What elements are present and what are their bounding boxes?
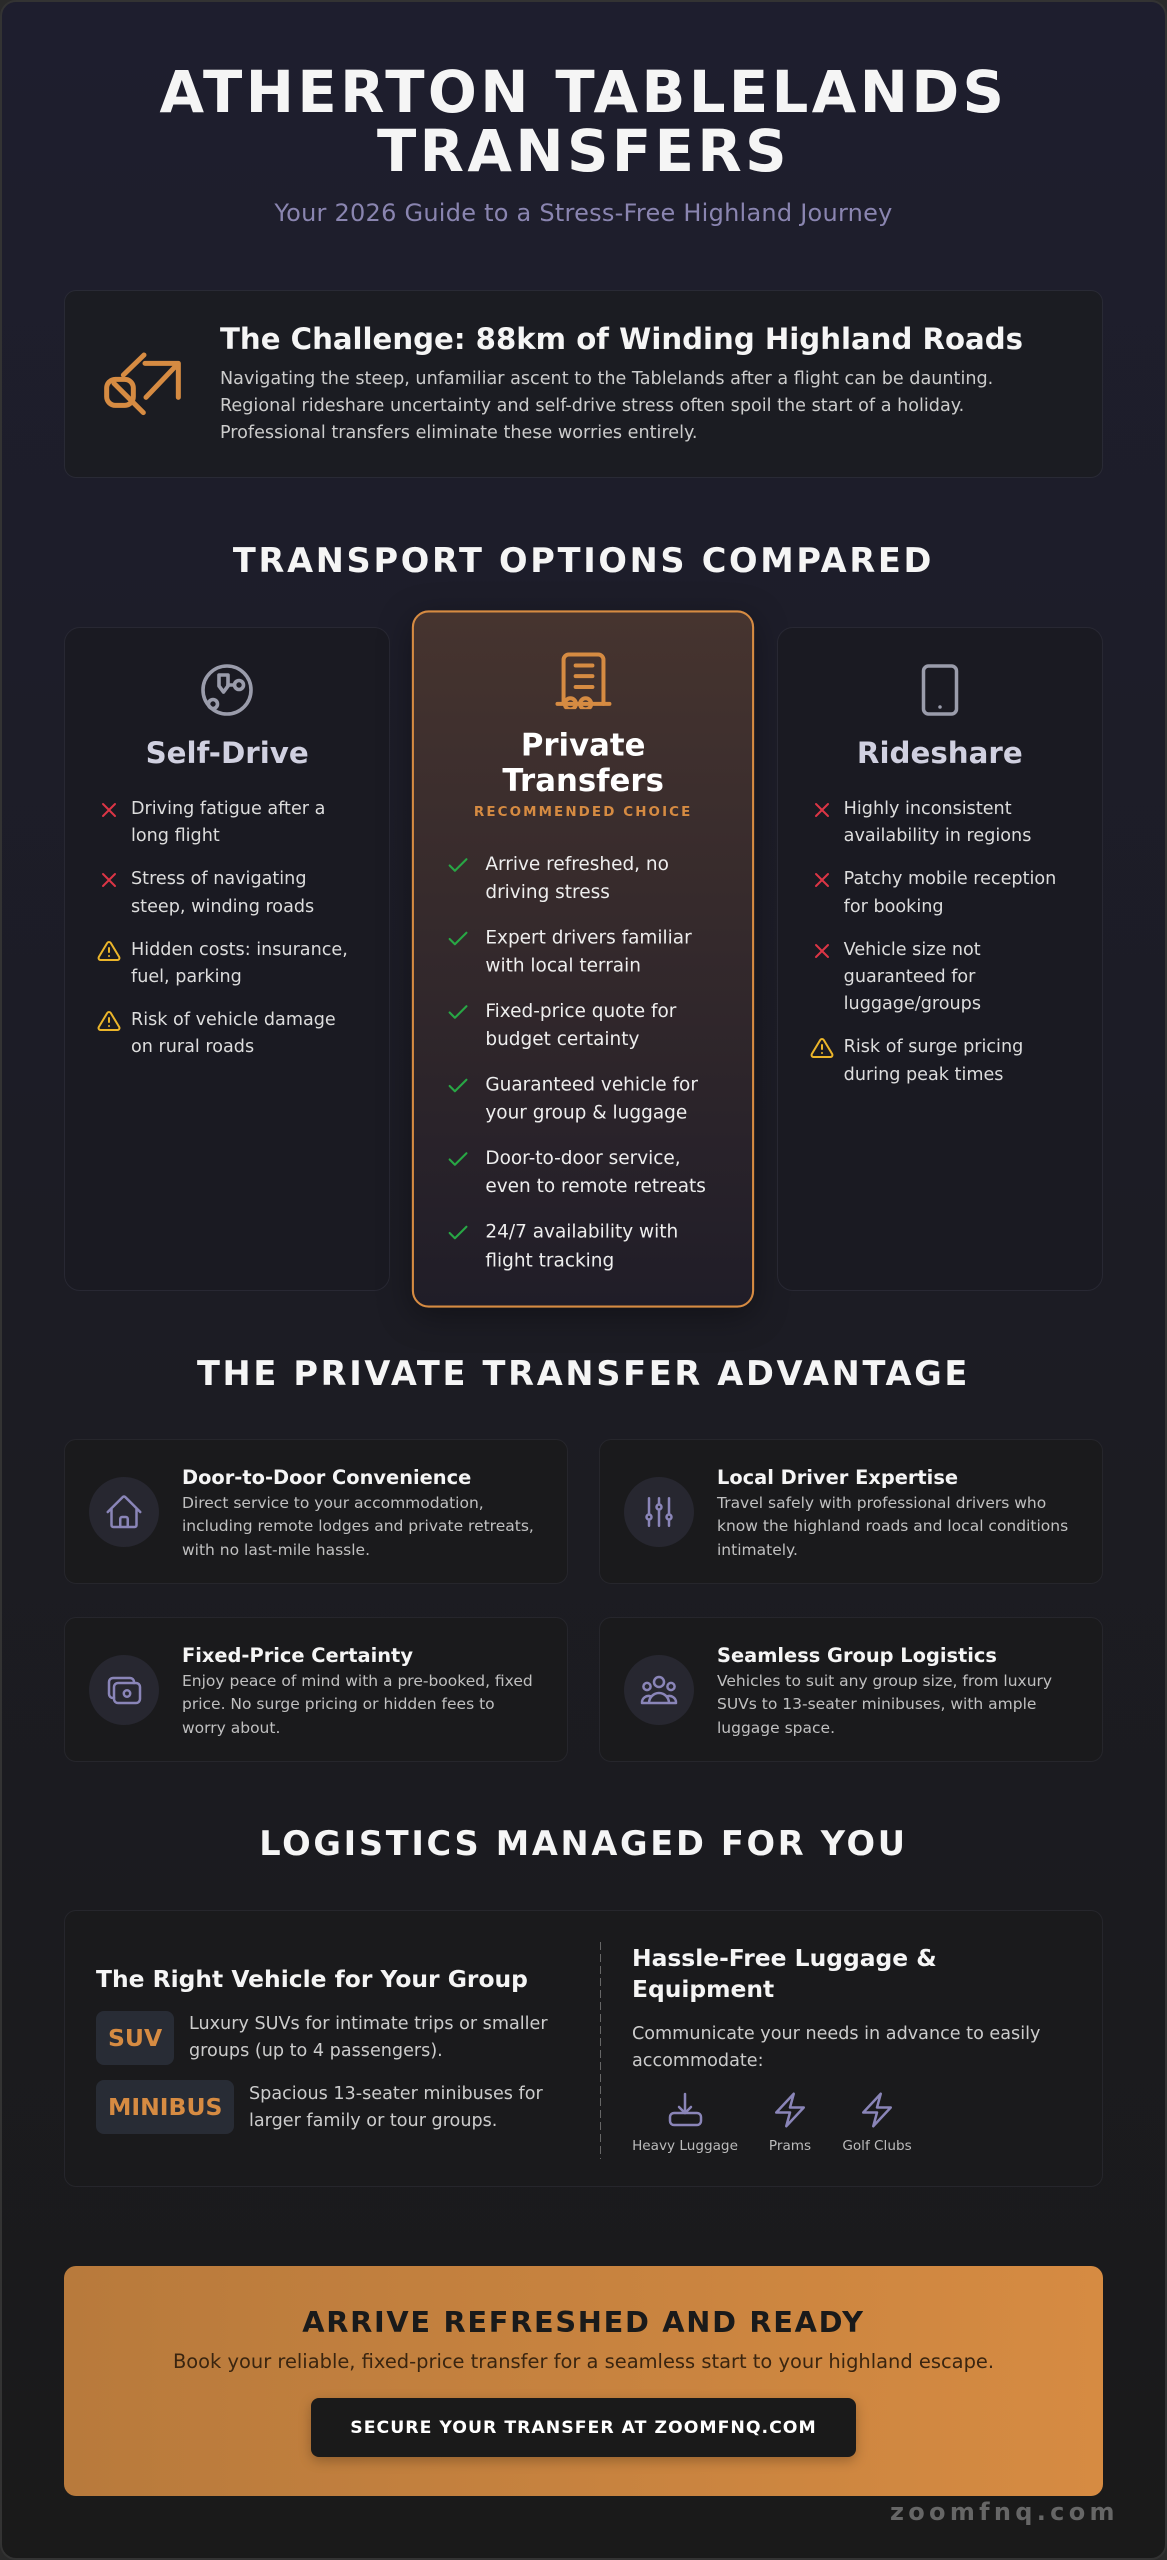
private list <box>448 854 706 1271</box>
panel: call to action <box>64 2266 1103 2496</box>
panel: challenge <box>64 290 1103 478</box>
SUV text: Luxury SUVs for intimate trips or smaller <box>189 2014 548 2034</box>
rideshare list: Patchy mobile reception <box>844 869 1056 889</box>
panel: door-to-door <box>64 1439 568 1584</box>
luggage heading <box>632 1944 937 2003</box>
self-drive list: long flight <box>131 826 220 846</box>
luggage heading: Equipment <box>632 1975 774 2003</box>
private list: Guaranteed vehicle for <box>486 1075 698 1096</box>
icon: winding road <box>104 352 181 416</box>
group logistics text: Vehicles to suit any group size, from luxury <box>717 1672 1052 1690</box>
panel: group logistics <box>599 1617 1103 1762</box>
fixed price text: price. No surge pricing or hidden fees to <box>182 1695 495 1713</box>
group logistics heading: Seamless Group Logistics <box>717 1644 997 1667</box>
self-drive list: steep, winding roads <box>131 897 314 917</box>
fixed price text: Enjoy peace of mind with a pre-booked, fixed <box>182 1672 533 1690</box>
group logistics text: SUVs to 13-seater minibuses, with ample <box>717 1695 1036 1713</box>
fixed price text: worry about. <box>182 1719 280 1737</box>
luggage text <box>632 2024 1040 2071</box>
panel: self-drive <box>64 627 390 1291</box>
private heading: Transfers <box>503 763 664 798</box>
SUV text: groups (up to 4 passengers). <box>189 2041 443 2061</box>
rideshare list: Risk of surge pricing <box>844 1037 1023 1057</box>
rideshare list: for booking <box>844 897 944 917</box>
private list: 24/7 availability with <box>486 1222 679 1243</box>
self-drive list: Hidden costs: insurance, <box>131 940 348 960</box>
minibus text: Spacious 13-seater minibuses for <box>249 2084 543 2104</box>
icon: heavy luggage <box>668 2092 702 2126</box>
watermark: zoomfnq.com <box>890 2498 1119 2526</box>
private list: flight tracking <box>486 1250 615 1271</box>
icon: self-drive <box>201 664 253 716</box>
badge: minibus: MINIBUS <box>108 2093 222 2121</box>
label: heavy luggage: Heavy Luggage <box>632 2138 738 2154</box>
fixed price text <box>182 1672 533 1737</box>
self-drive list: fuel, parking <box>131 967 242 987</box>
private list: Arrive refreshed, no <box>486 854 669 875</box>
panel: logistics <box>64 1910 1103 2187</box>
title: TRANSFERS <box>377 118 790 184</box>
self-drive list: Stress of navigating <box>131 869 306 889</box>
local driver text: know the highland roads and local conditions <box>717 1517 1068 1535</box>
private heading <box>502 726 664 798</box>
rideshare list: availability in regions <box>844 826 1031 846</box>
private list: your group & luggage <box>486 1103 688 1124</box>
local driver text: Travel safely with professional drivers who <box>717 1494 1046 1512</box>
title <box>160 59 1007 184</box>
private list: even to remote retreats <box>486 1177 706 1198</box>
recommended tag: RECOMMENDED CHOICE <box>474 805 693 821</box>
SUV text <box>189 2014 548 2061</box>
self-drive list <box>98 799 348 1057</box>
self-drive list: Risk of vehicle damage <box>131 1010 336 1030</box>
heading: advantage: THE PRIVATE TRANSFER ADVANTAGE <box>197 1354 970 1393</box>
rideshare list: luggage/groups <box>844 994 981 1014</box>
door-to-door heading: Door-to-Door Convenience <box>182 1466 471 1489</box>
minibus text <box>249 2084 543 2131</box>
icon: golf clubs <box>862 2092 892 2128</box>
private list: driving stress <box>486 882 610 903</box>
challenge text: Navigating the steep, unfamiliar ascent to the Tablelands after a flight can be daunting. <box>220 369 993 389</box>
private list: with local terrain <box>486 956 641 977</box>
local driver heading: Local Driver Expertise <box>717 1466 958 1489</box>
rideshare list: Highly inconsistent <box>844 799 1012 819</box>
door-to-door text: Direct service to your accommodation, <box>182 1494 484 1512</box>
challenge text <box>220 369 993 443</box>
group logistics text <box>717 1672 1052 1737</box>
fixed price heading: Fixed-Price Certainty <box>182 1644 413 1667</box>
subtitle: Your 2026 Guide to a Stress-Free Highland Journey <box>274 198 893 226</box>
local driver text: intimately. <box>717 1541 798 1559</box>
heading: logistics: LOGISTICS MANAGED FOR YOU <box>259 1824 908 1863</box>
rideshare list: during peak times <box>844 1065 1003 1085</box>
icon: phone <box>922 664 958 716</box>
rideshare list: guaranteed for <box>844 967 975 987</box>
panel: fixed price <box>64 1617 568 1762</box>
label: prams: Prams <box>769 2138 811 2154</box>
heading: transport options: TRANSPORT OPTIONS COMPARED <box>233 541 934 580</box>
door-to-door text: including remote lodges and private retreats, <box>182 1517 534 1535</box>
local driver text <box>716 1494 1068 1559</box>
panel: private transfers <box>412 610 755 1308</box>
icon: sliders <box>624 1477 694 1547</box>
cta button: SECURE YOUR TRANSFER AT ZOOMFNQ.COM <box>350 2418 817 2438</box>
challenge text: Regional rideshare uncertainty and self-drive stress often spoil the start of a holiday. <box>220 396 964 416</box>
private heading: Private <box>521 726 646 762</box>
luggage text: accommodate: <box>632 2051 764 2071</box>
cta text: Book your reliable, fixed-price transfer for a seamless start to your highland escape. <box>173 2350 994 2373</box>
self-drive list: on rural roads <box>131 1037 254 1057</box>
private list: Fixed-price quote for <box>486 1001 677 1022</box>
self-drive heading: Self-Drive <box>146 736 309 770</box>
private list: Door-to-door service, <box>486 1148 681 1169</box>
door-to-door text: with no last-mile hassle. <box>182 1541 370 1559</box>
panel: rideshare <box>777 627 1103 1291</box>
vehicle heading: The Right Vehicle for Your Group <box>96 1965 528 1993</box>
rideshare heading: Rideshare <box>857 736 1023 770</box>
icon: group <box>624 1655 694 1725</box>
cta heading: ARRIVE REFRESHED AND READY <box>302 2305 865 2339</box>
icon: private transfer <box>556 652 612 710</box>
door-to-door text <box>182 1494 534 1559</box>
rideshare list <box>810 799 1056 1085</box>
badge: minibus <box>96 2080 234 2134</box>
icon: prams <box>775 2092 805 2128</box>
icon: house <box>89 1477 159 1547</box>
self-drive list: Driving fatigue after a <box>131 799 325 819</box>
badge: SUV <box>96 2011 174 2065</box>
rideshare list: Vehicle size not <box>844 940 981 960</box>
badge: SUV: SUV <box>108 2024 162 2052</box>
private list: Expert drivers familiar <box>486 927 692 948</box>
group logistics text: luggage space. <box>717 1719 835 1737</box>
challenge heading: The Challenge: 88km of Winding Highland Roads <box>220 322 1023 356</box>
title: ATHERTON TABLELANDS <box>160 59 1007 126</box>
challenge text: Professional transfers eliminate these worries entirely. <box>220 423 698 443</box>
private list: budget certainty <box>486 1030 640 1051</box>
icon: banknotes <box>89 1655 159 1725</box>
cta button <box>311 2398 856 2457</box>
minibus text: larger family or tour groups. <box>249 2111 497 2131</box>
luggage heading: Hassle-Free Luggage & <box>632 1944 937 1972</box>
label: golf clubs: Golf Clubs <box>842 2138 912 2154</box>
luggage text: Communicate your needs in advance to easily <box>632 2024 1040 2044</box>
panel: local driver <box>599 1439 1103 1584</box>
